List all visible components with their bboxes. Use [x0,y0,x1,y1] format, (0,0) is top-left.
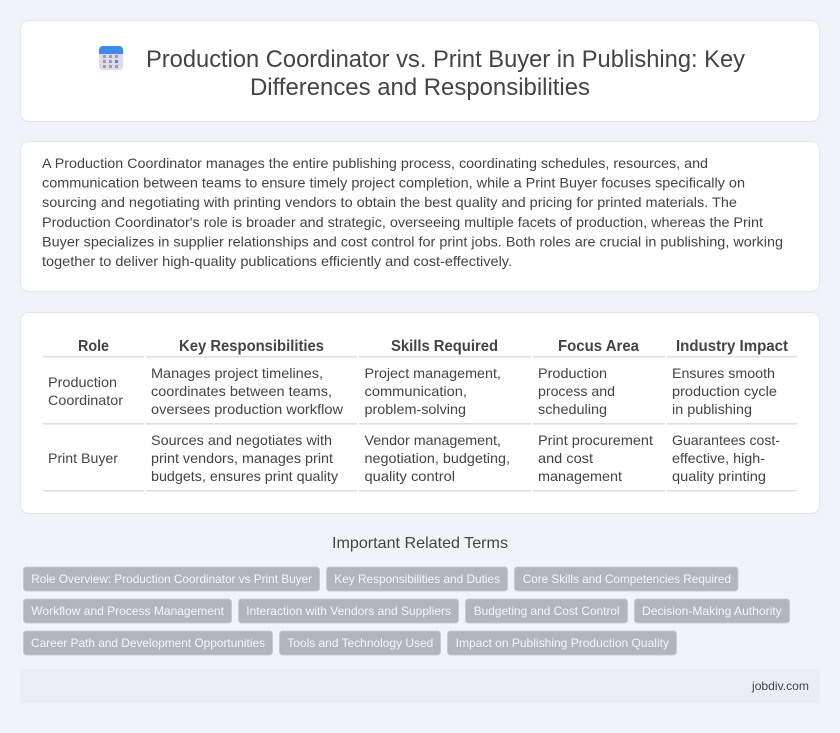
table row: Print Buyer: negotiation, budgeting, [364,450,510,466]
table row: Production Coordinator: communication, [364,383,467,399]
text block: summary: Buyer specializes in supplier relationships and cost control for print jobs. Both roles are crucial in publishing, working [42,233,783,249]
text block: summary: together to deliver high-quality publications efficiently and cost-effectively. [42,253,512,269]
text block: summary [42,155,783,269]
tag: Role Overview: Production Coordinator vs Print Buyer [31,572,312,586]
tag [238,599,458,623]
table header row: Role [78,338,109,355]
table header row: Focus Area [558,338,639,355]
tag [24,599,232,623]
table row: Production Coordinator: problem-solving [364,401,466,417]
table row: Production Coordinator: process and [538,383,615,399]
table row: Production Coordinator: production cycle [672,383,777,399]
table row: Production Coordinator: coordinates between teams, [151,383,332,399]
table row: Production Coordinator: scheduling [538,401,607,417]
table row: Production Coordinator: Production [48,374,117,390]
panel: summary paragraph [20,142,820,292]
text block: summary: Production Coordinator's role is broader and strategic, overseeing multiple facets of production, whereas the Print [42,214,763,230]
heading: important related terms: Important Related Terms [332,535,508,552]
table row: Production Coordinator: Project management, [364,365,501,381]
table header row [43,338,797,358]
footer bar [20,669,820,703]
tag: Core Skills and Competencies Required [523,572,731,586]
table row: Print Buyer: quality printing [672,468,766,484]
icon: calendar [99,46,123,70]
table row: Print Buyer: management [538,468,622,484]
tag [24,631,272,655]
text block: summary: A Production Coordinator manages the entire publishing process, coordinating schedules, resources, and [42,155,708,171]
table row: Print Buyer: Vendor management, [364,432,501,448]
tag: Career Path and Development Opportunities [31,636,265,650]
tag [634,599,790,623]
table row: Print Buyer: Guarantees cost- [672,432,780,448]
table row: Production Coordinator: Production [538,365,607,381]
panel: comparison table [20,312,820,514]
table row: Print Buyer: effective, high- [672,450,765,466]
title [146,46,745,101]
table row: Print Buyer: quality control [364,468,455,484]
table row: Print Buyer: print vendors, manages print [151,450,333,466]
table row: Print Buyer: Print Buyer [48,450,118,466]
tag list: related terms [24,567,790,655]
panel: header [20,20,820,122]
tag: Budgeting and Cost Control [474,604,620,618]
table row: Production Coordinator: Manages project timelines, [151,365,323,381]
footer source: jobdiv.com [751,679,809,693]
tag [448,631,676,655]
title: Production Coordinator vs. Print Buyer in Publishing: Key [146,46,745,73]
tag: Key Responsibilities and Duties [334,572,500,586]
table header row: Skills Required [391,338,498,355]
tag [326,567,508,591]
tag: Tools and Technology Used [287,636,433,650]
table row: Print Buyer: budgets, ensures print quality [151,468,338,484]
tag: Impact on Publishing Production Quality [456,636,669,650]
table header row: Industry Impact [676,338,789,355]
text block: summary: communication between teams to ensure timely project completion, while a Print Buyer focuses specifically on [42,175,745,191]
table row: Production Coordinator: Ensures smooth [672,365,775,381]
tag: Workflow and Process Management [31,604,225,618]
table row: Production Coordinator: oversees production workflow [151,401,344,417]
tag: Interaction with Vendors and Suppliers [246,604,451,618]
table row: Production Coordinator [43,365,797,424]
text block: summary: sourcing and negotiating with printing vendors to obtain the best quality and pricing for printed materials. The [42,194,737,210]
title: Differences and Responsibilities [250,74,590,101]
table row: Production Coordinator: in publishing [672,401,752,417]
tag [466,599,628,623]
tag [280,631,440,655]
tag: Decision-Making Authority [642,604,782,618]
table row: Print Buyer: Sources and negotiates with [151,432,332,448]
table row: Print Buyer: and cost [538,450,593,466]
table row: Print Buyer [43,432,797,492]
tag [514,567,738,591]
table header row: Key Responsibilities [179,338,324,355]
table row: Production Coordinator: Coordinator [48,392,123,408]
table row: Print Buyer: Print procurement [538,432,653,448]
tag [24,567,320,591]
